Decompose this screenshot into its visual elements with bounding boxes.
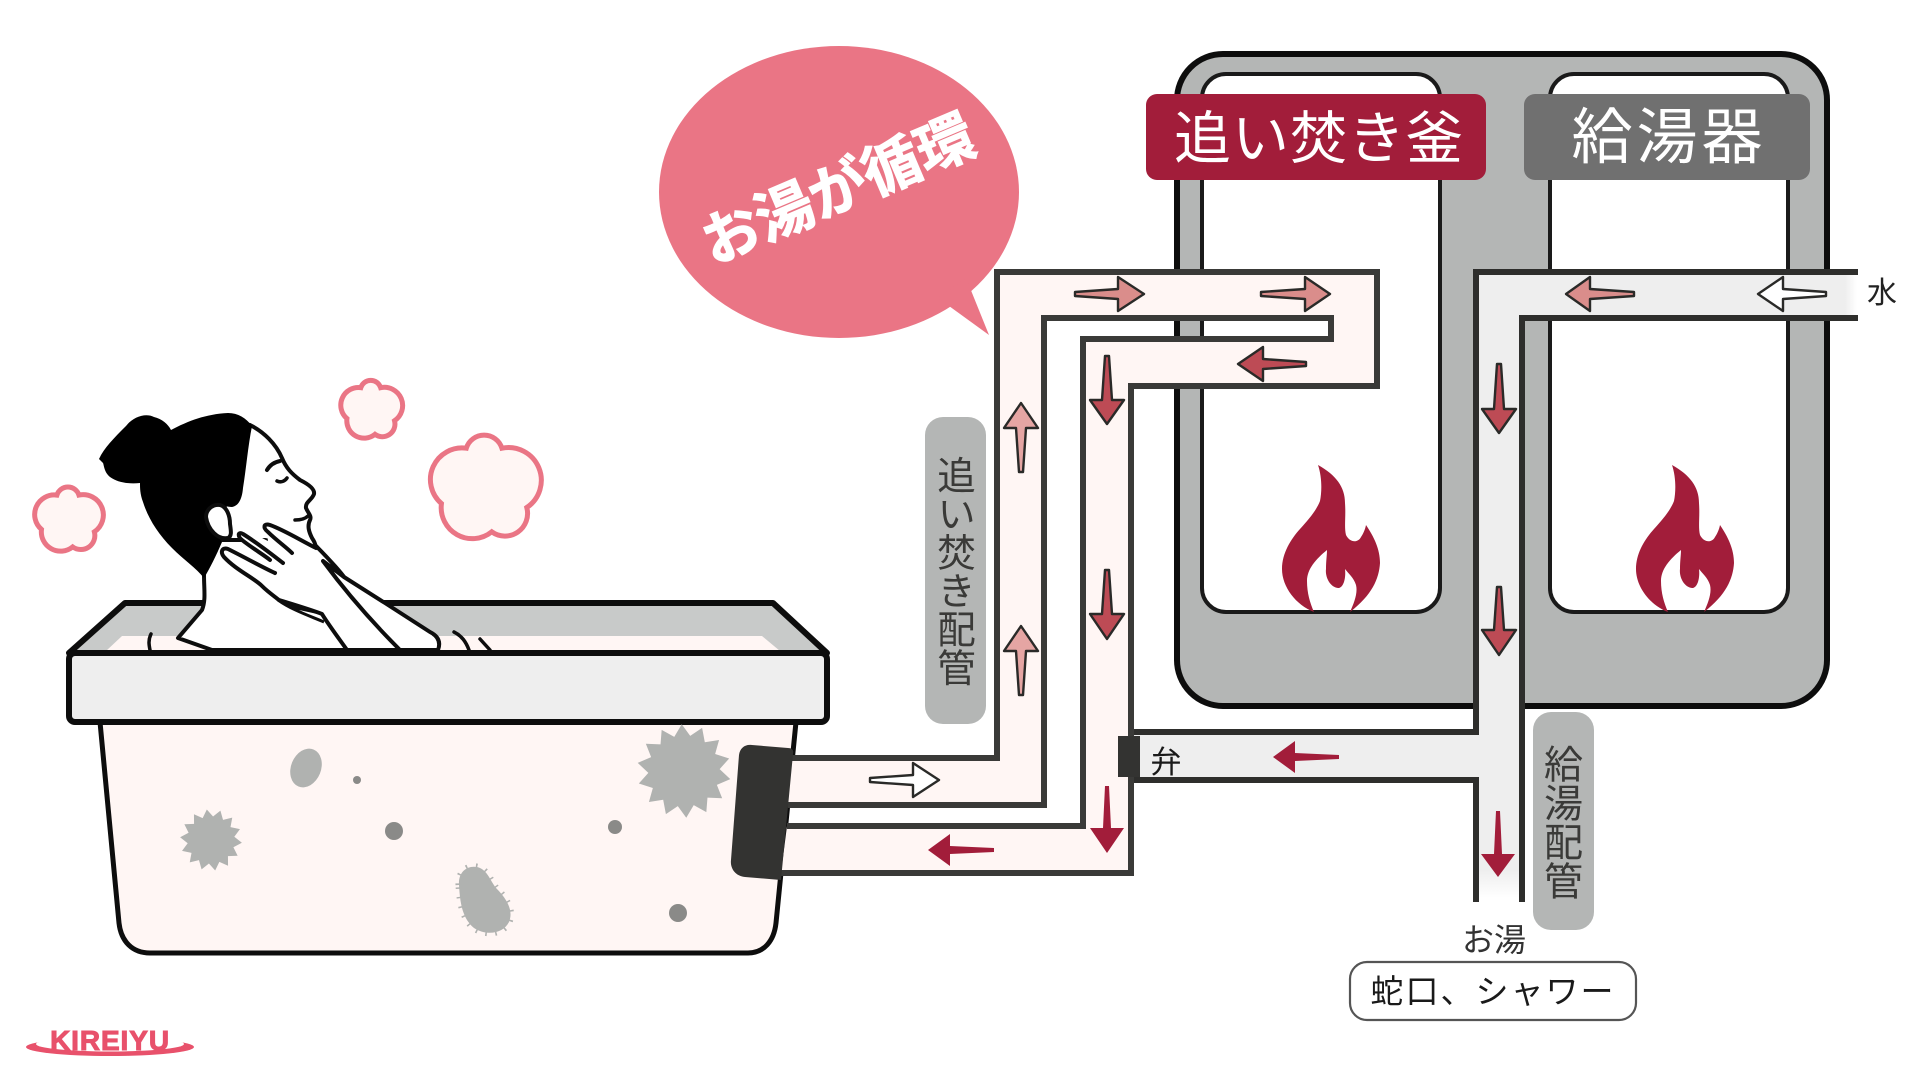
label box: 蛇口、シャワー xyxy=(1350,962,1636,1020)
arrow: left to tub xyxy=(928,834,994,866)
arrow: up 1 xyxy=(1004,403,1038,472)
tub rim xyxy=(69,653,827,722)
water heater chamber xyxy=(1550,74,1788,612)
label box: 蛇口、シャワー: 蛇口、シャワー xyxy=(1370,973,1616,1010)
label: 追い焚き釜: 追い焚き釜 xyxy=(1174,107,1464,171)
fingers in the water xyxy=(149,632,490,650)
pill: 追い焚き配管: 追い焚き配管 xyxy=(932,456,975,686)
tub body xyxy=(100,722,796,953)
arrow: left return xyxy=(1238,347,1306,381)
icon: flame in water heater xyxy=(1636,465,1734,612)
ear xyxy=(206,505,231,538)
arrow: hot down 1 xyxy=(1482,364,1516,433)
closed eye xyxy=(277,478,287,482)
hand xyxy=(222,523,350,625)
arrow: to valve xyxy=(1273,741,1339,773)
steam cloud top xyxy=(341,380,403,438)
arrow: down 2 xyxy=(1090,570,1124,639)
label: 給湯器: 給湯器 xyxy=(1571,103,1767,171)
forearm line xyxy=(316,546,400,650)
icon: flame in reheating boiler xyxy=(1282,465,1380,612)
pill: 給湯配管: 給湯配管 xyxy=(1538,744,1583,900)
arrow: up 2 xyxy=(1004,626,1038,695)
label: お湯: お湯 xyxy=(1462,922,1526,958)
arrow: white into loop xyxy=(870,763,939,797)
steam cloud large xyxy=(430,435,541,539)
label: 給湯器 xyxy=(1524,94,1810,180)
arrow: right 1 xyxy=(1075,277,1144,311)
medium germ xyxy=(177,807,245,873)
tub top opening xyxy=(69,603,827,653)
valve xyxy=(1118,736,1140,777)
hair xyxy=(99,413,252,578)
body and arm xyxy=(178,500,439,650)
bath water surface xyxy=(106,636,780,651)
speech bubble: お湯が循環 xyxy=(659,46,1019,338)
mouth xyxy=(295,516,308,520)
boiler unit housing xyxy=(1177,54,1827,706)
reheating chamber xyxy=(1202,74,1440,612)
arrow: down 3 xyxy=(1090,786,1124,853)
logo: KIREIYU: KIREIYU xyxy=(50,1025,170,1056)
face xyxy=(220,425,315,550)
bathtub and bather xyxy=(69,413,827,953)
tub outlet connector xyxy=(731,745,793,880)
label: 追い焚き釜 xyxy=(1146,94,1486,180)
large germ xyxy=(630,718,738,824)
water supply pipe xyxy=(1131,272,1858,902)
underarm xyxy=(278,600,324,622)
spores xyxy=(353,776,361,784)
reheating loop pipe xyxy=(781,272,1377,873)
eyebrow xyxy=(267,461,280,470)
pill: 追い焚き配管 xyxy=(925,417,986,724)
small bacterium xyxy=(285,744,327,792)
label: 水: 水 xyxy=(1867,277,1897,310)
arrow: water white xyxy=(1758,277,1826,311)
arrow: down 1 xyxy=(1090,356,1124,424)
woman xyxy=(99,413,490,650)
pill: 給湯配管 xyxy=(1533,712,1594,930)
label: 弁: 弁 xyxy=(1150,745,1182,780)
arrow: hot down 3 xyxy=(1481,811,1515,877)
large bacterium xyxy=(459,867,511,933)
arrow: right 2 xyxy=(1261,277,1330,311)
bubble text: お湯が循環 xyxy=(692,103,985,277)
arrow: hot down 2 xyxy=(1482,587,1516,655)
steam cloud left xyxy=(35,487,103,551)
arrow: water warming xyxy=(1566,277,1634,311)
germs on tub wall xyxy=(177,718,738,933)
